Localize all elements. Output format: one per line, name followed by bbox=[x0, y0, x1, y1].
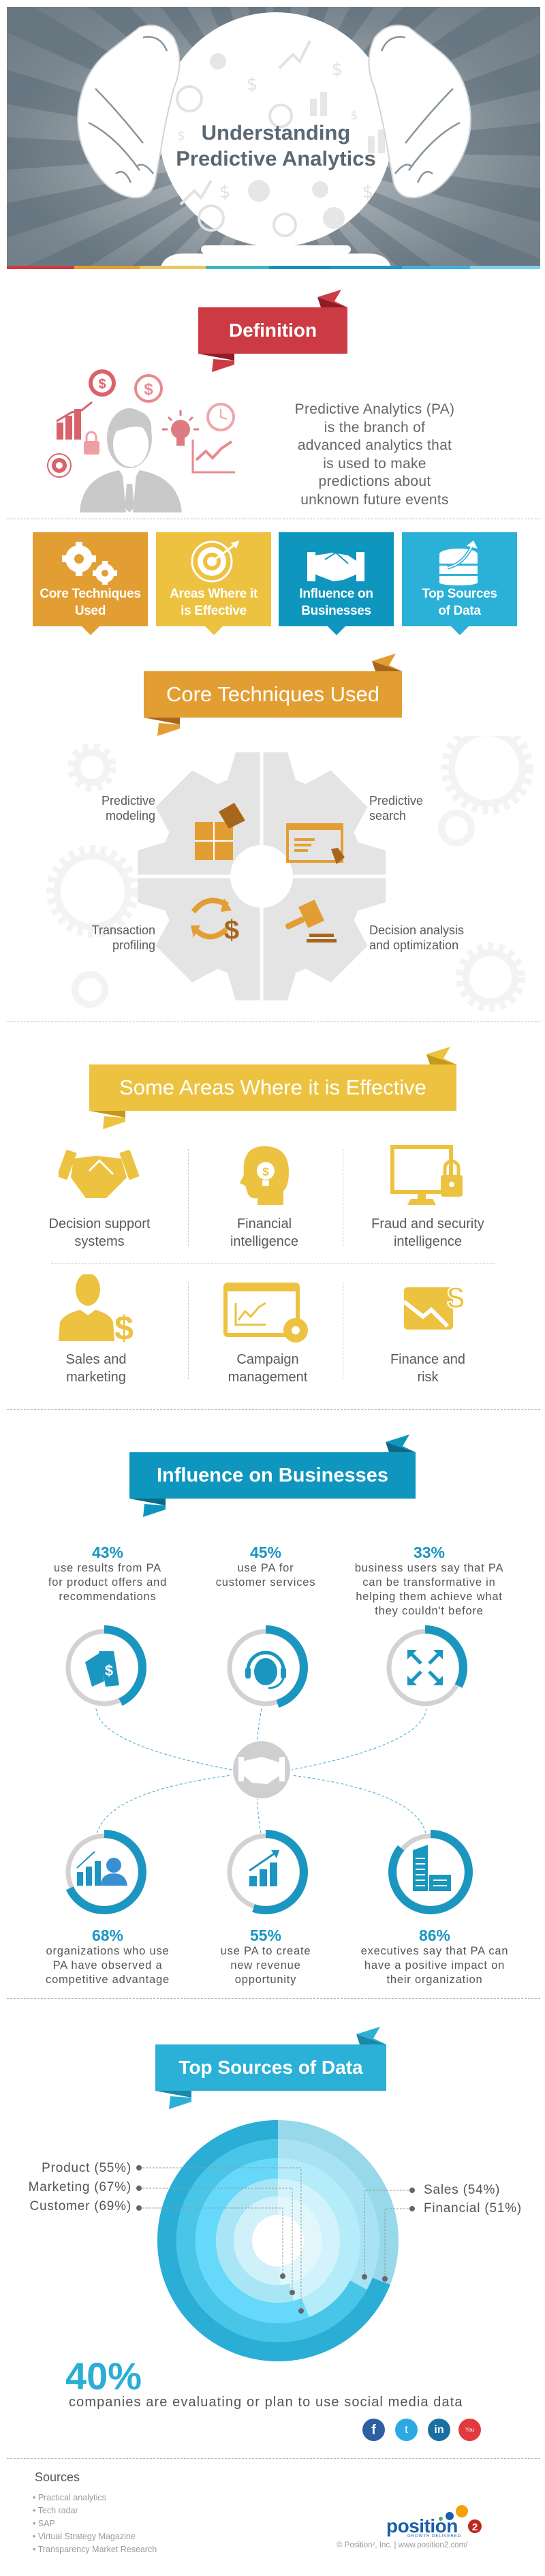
area: decision support: systems bbox=[74, 1234, 125, 1249]
category box: sources: Top Sources bbox=[422, 587, 497, 601]
definition text bbox=[295, 401, 454, 507]
area: decision support bbox=[49, 1150, 150, 1249]
donut labels right bbox=[424, 2183, 522, 2215]
ribbon: Top Sources of Data bbox=[155, 2027, 386, 2109]
category box: influence: Businesses bbox=[301, 604, 371, 618]
category box: core techniques: Core Techniques bbox=[40, 587, 141, 601]
stat: 68% bbox=[46, 1927, 170, 1986]
right hand bbox=[369, 25, 471, 198]
category box: sources bbox=[402, 532, 517, 626]
stat: 43%: use results from PA bbox=[54, 1562, 161, 1574]
label: predictive search: Predictive bbox=[369, 794, 423, 808]
area: fraud and security: Fraud and security bbox=[371, 1216, 484, 1231]
definition text: is used to make bbox=[323, 455, 426, 472]
logo: GROWTH DELIVERED bbox=[407, 2534, 461, 2539]
donut labels right: Financial (51%) bbox=[424, 2201, 522, 2215]
color stripe bbox=[7, 266, 540, 269]
definition illustration: $ bbox=[144, 380, 153, 399]
definition text: is the branch of bbox=[324, 420, 425, 435]
category box: influence bbox=[279, 532, 394, 626]
stat: 68%: PA have observed a bbox=[53, 1959, 162, 1972]
stat: 55% bbox=[221, 1927, 311, 1986]
stat: 43%: recommendations bbox=[59, 1591, 157, 1603]
definition illustration bbox=[47, 369, 235, 512]
donut labels left: Customer (69%) bbox=[29, 2199, 131, 2213]
social icons: f bbox=[371, 2423, 376, 2438]
ribbon: Core Techniques Used bbox=[144, 654, 402, 736]
stat: 33%: business users say that PA bbox=[355, 1562, 503, 1574]
icon: refresh dollar: $ bbox=[224, 915, 239, 945]
label: decision analysis bbox=[369, 923, 464, 952]
area: fraud and security bbox=[371, 1145, 484, 1249]
logo bbox=[386, 2505, 482, 2539]
sources list: • Transparency Market Research bbox=[33, 2545, 157, 2554]
copyright: © Position², Inc. | www.position2.com/ bbox=[337, 2541, 467, 2549]
icon: refresh dollar bbox=[191, 898, 239, 945]
stat: 68%: organizations who use bbox=[46, 1945, 169, 1957]
sources list: • Virtual Strategy Magazine bbox=[33, 2532, 136, 2541]
stat: 45% bbox=[216, 1544, 315, 1589]
social icons: You bbox=[465, 2427, 474, 2433]
stat: 43%: 43% bbox=[92, 1544, 123, 1561]
stat: 55%: 55% bbox=[250, 1927, 281, 1944]
area: fraud and security: intelligence bbox=[394, 1234, 462, 1249]
definition illustration: $ bbox=[98, 377, 106, 392]
donut chart bbox=[136, 2120, 415, 2361]
crystal ball illustration bbox=[77, 12, 471, 266]
icon: browser bbox=[287, 825, 345, 864]
category box: areas bbox=[156, 532, 271, 626]
ring 33% bbox=[387, 1629, 463, 1706]
logo: 2 bbox=[472, 2521, 478, 2533]
stat: 68%: competitive advantage bbox=[46, 1974, 170, 1986]
core techniques gear bbox=[132, 752, 386, 1000]
social icons bbox=[362, 2419, 481, 2441]
area: sales and marketing bbox=[59, 1274, 134, 1385]
stat: 55%: use PA to create bbox=[221, 1945, 311, 1957]
label: predictive modeling bbox=[102, 794, 155, 823]
area: finance and risk: Finance and bbox=[390, 1352, 465, 1367]
title: Predictive Analytics bbox=[176, 147, 376, 170]
ring 45% bbox=[228, 1629, 304, 1706]
title: Understanding bbox=[202, 121, 350, 144]
stat: 68%: 68% bbox=[92, 1927, 123, 1944]
stat: 33% bbox=[355, 1544, 503, 1617]
definition text: Predictive Analytics (PA) bbox=[295, 401, 454, 417]
stat: 45%: 45% bbox=[250, 1544, 281, 1561]
stat: 86%: 86% bbox=[419, 1927, 450, 1944]
donut labels left: Product (55%) bbox=[42, 2161, 131, 2175]
icon: handshake bbox=[307, 552, 364, 581]
ribbon: Core Techniques Used: Core Techniques Used bbox=[166, 682, 379, 706]
logo: position bbox=[386, 2515, 458, 2536]
area: financial intelligence bbox=[230, 1146, 298, 1249]
donut labels left bbox=[29, 2161, 131, 2213]
ribbon: Some Areas: Some Areas Where it is Effective bbox=[119, 1075, 426, 1099]
label: predictive search: search bbox=[369, 809, 406, 823]
category box: areas: is Effective bbox=[181, 604, 247, 618]
category box: core techniques bbox=[33, 532, 148, 626]
sources list: • Tech radar bbox=[33, 2506, 78, 2515]
stat: 86%: their organization bbox=[387, 1974, 482, 1986]
label: decision analysis: Decision analysis bbox=[369, 923, 464, 937]
stat: 86% bbox=[361, 1927, 508, 1986]
category box: sources: of Data bbox=[438, 604, 481, 618]
background gears bbox=[46, 736, 533, 1012]
label: transaction profiling: profiling bbox=[112, 938, 155, 952]
areas grid bbox=[49, 1145, 495, 1385]
stat: 86%: have a positive impact on bbox=[364, 1959, 505, 1972]
center handshake bbox=[233, 1741, 290, 1798]
icon: target bbox=[191, 540, 239, 582]
stat: 33%: 33% bbox=[414, 1544, 445, 1561]
area: finance and risk: risk bbox=[417, 1370, 439, 1385]
area: financial intelligence: $ bbox=[262, 1165, 269, 1178]
area: sales and marketing: Sales and bbox=[66, 1352, 126, 1367]
crystal ball illustration: $ bbox=[362, 182, 373, 202]
ring 68% bbox=[66, 1834, 142, 1910]
ring 43%: $ bbox=[105, 1662, 113, 1679]
category box: core techniques: Used bbox=[75, 604, 106, 618]
definition text: predictions about bbox=[318, 474, 431, 489]
sources list: • Practical analytics bbox=[33, 2493, 106, 2502]
definition text: advanced analytics that bbox=[298, 438, 452, 453]
influence network diagram bbox=[65, 1625, 473, 1914]
social icons: t bbox=[405, 2424, 408, 2436]
ribbon: Definition: Definition bbox=[229, 320, 317, 341]
icon: gears bbox=[62, 542, 117, 585]
sources heading: Sources bbox=[35, 2470, 80, 2484]
donut labels left: Marketing (67%) bbox=[29, 2180, 131, 2194]
crystal ball illustration: $ bbox=[177, 129, 185, 143]
area: financial intelligence: intelligence bbox=[230, 1234, 298, 1249]
stat: 45%: use PA for bbox=[238, 1562, 294, 1574]
crystal ball illustration: $ bbox=[332, 59, 343, 80]
label: predictive modeling: Predictive bbox=[102, 794, 155, 808]
ring 86% bbox=[392, 1834, 469, 1910]
stat: 55%: opportunity bbox=[235, 1974, 296, 1986]
ribbon: Influence on Businesses: Influence on Businesses bbox=[157, 1465, 388, 1486]
area: sales and marketing: marketing bbox=[66, 1370, 126, 1385]
stat: 86%: executives say that PA can bbox=[361, 1945, 508, 1957]
area: campaign management: management bbox=[228, 1370, 307, 1385]
stat: 55%: new revenue bbox=[230, 1959, 301, 1972]
icon: puzzle bbox=[195, 803, 245, 860]
stat: 33%: they couldn't before bbox=[375, 1605, 484, 1617]
label: transaction profiling: Transaction bbox=[92, 923, 155, 937]
ring 43% bbox=[66, 1629, 142, 1706]
stat: 33%: helping them achieve what bbox=[356, 1591, 503, 1603]
ribbon: Definition bbox=[198, 290, 347, 372]
label: predictive search bbox=[369, 794, 423, 823]
header banner bbox=[7, 7, 540, 269]
label: predictive modeling: modeling bbox=[106, 809, 155, 823]
sources list: • SAP bbox=[33, 2519, 55, 2528]
40% stat: 40% bbox=[65, 2355, 142, 2397]
40% caption: companies are evaluating or plan to use social media data bbox=[69, 2395, 463, 2410]
icon: database bbox=[439, 540, 478, 585]
donut labels right: Sales (54%) bbox=[424, 2183, 500, 2197]
category box: areas: Areas Where it bbox=[170, 587, 258, 601]
area: decision support: Decision support bbox=[49, 1216, 150, 1231]
stat: 45%: customer services bbox=[216, 1576, 315, 1589]
ring 55% bbox=[228, 1834, 304, 1910]
label: decision analysis: and optimization bbox=[369, 938, 458, 952]
crystal ball illustration: $ bbox=[247, 74, 258, 95]
label: transaction profiling bbox=[92, 923, 155, 952]
ribbon: Some Areas bbox=[89, 1047, 456, 1129]
ribbon: Top Sources of Data: Top Sources of Data bbox=[178, 2057, 363, 2078]
sources list bbox=[33, 2493, 157, 2554]
area: campaign management: Campaign bbox=[236, 1352, 299, 1367]
area: finance and risk: $ bbox=[447, 1280, 465, 1315]
category box: influence: Influence on bbox=[299, 587, 373, 601]
left hand bbox=[78, 25, 180, 198]
crystal ball illustration: $ bbox=[219, 182, 230, 202]
area: financial intelligence: Financial bbox=[237, 1216, 292, 1231]
stat: 43% bbox=[48, 1544, 167, 1603]
title bbox=[176, 121, 376, 170]
stat: 43%: for product offers and bbox=[48, 1576, 167, 1589]
area: finance and risk bbox=[390, 1280, 465, 1385]
definition text: unknown future events bbox=[300, 492, 449, 507]
area: campaign management bbox=[223, 1283, 308, 1385]
stat: 33%: can be transformative in bbox=[362, 1576, 496, 1589]
crystal ball illustration: $ bbox=[350, 108, 358, 123]
icon: gavel bbox=[285, 900, 337, 942]
ribbon: Influence on Businesses bbox=[129, 1435, 416, 1517]
social icons: in bbox=[434, 2424, 444, 2436]
